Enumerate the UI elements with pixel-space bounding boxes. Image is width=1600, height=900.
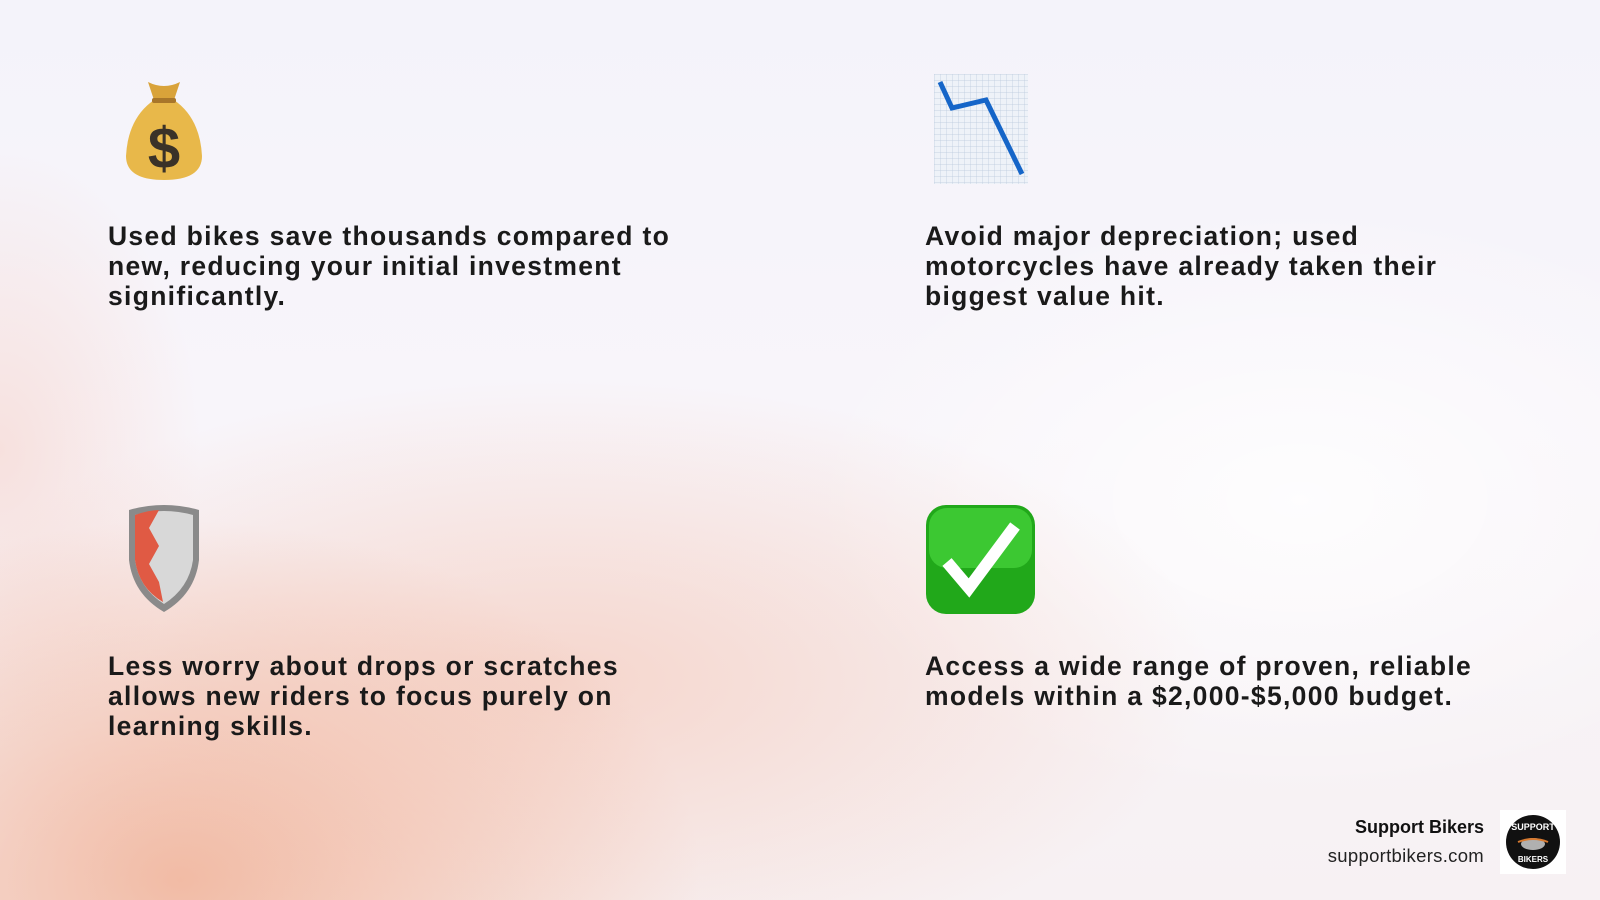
text: savings: new, reducing your initial investment — [108, 251, 622, 281]
logo: BIKERS — [1518, 855, 1549, 864]
text: drops: allows new riders to focus purely on — [108, 681, 613, 711]
text: models: Access a wide range of proven, reliable — [925, 651, 1472, 681]
text: models: models within a $2,000-$5,000 budget. — [925, 681, 1453, 711]
icon: money bag: $ — [148, 116, 180, 181]
icon: shield — [129, 505, 199, 612]
icon: check mark — [926, 505, 1035, 614]
brand block — [1328, 810, 1566, 874]
text: drops: Less worry about drops or scratches — [108, 651, 619, 681]
text: drops: learning skills. — [108, 711, 313, 741]
text: drops — [108, 651, 619, 741]
icon: chart decreasing — [934, 74, 1028, 184]
logo: SUPPORT — [1511, 822, 1555, 832]
icon: money bag — [126, 82, 202, 181]
brand name: Support Bikers — [1355, 817, 1484, 837]
text: depreciation: biggest value hit. — [925, 281, 1165, 311]
logo — [1500, 810, 1566, 874]
text: depreciation: Avoid major depreciation; used — [925, 221, 1359, 251]
text: models — [925, 651, 1472, 711]
text: savings: significantly. — [108, 281, 286, 311]
text: savings — [108, 221, 670, 311]
text: savings: Used bikes save thousands compared to — [108, 221, 670, 251]
text: depreciation: motorcycles have already taken their — [925, 251, 1437, 281]
brand url: supportbikers.com — [1328, 845, 1484, 866]
text: depreciation — [925, 221, 1437, 311]
